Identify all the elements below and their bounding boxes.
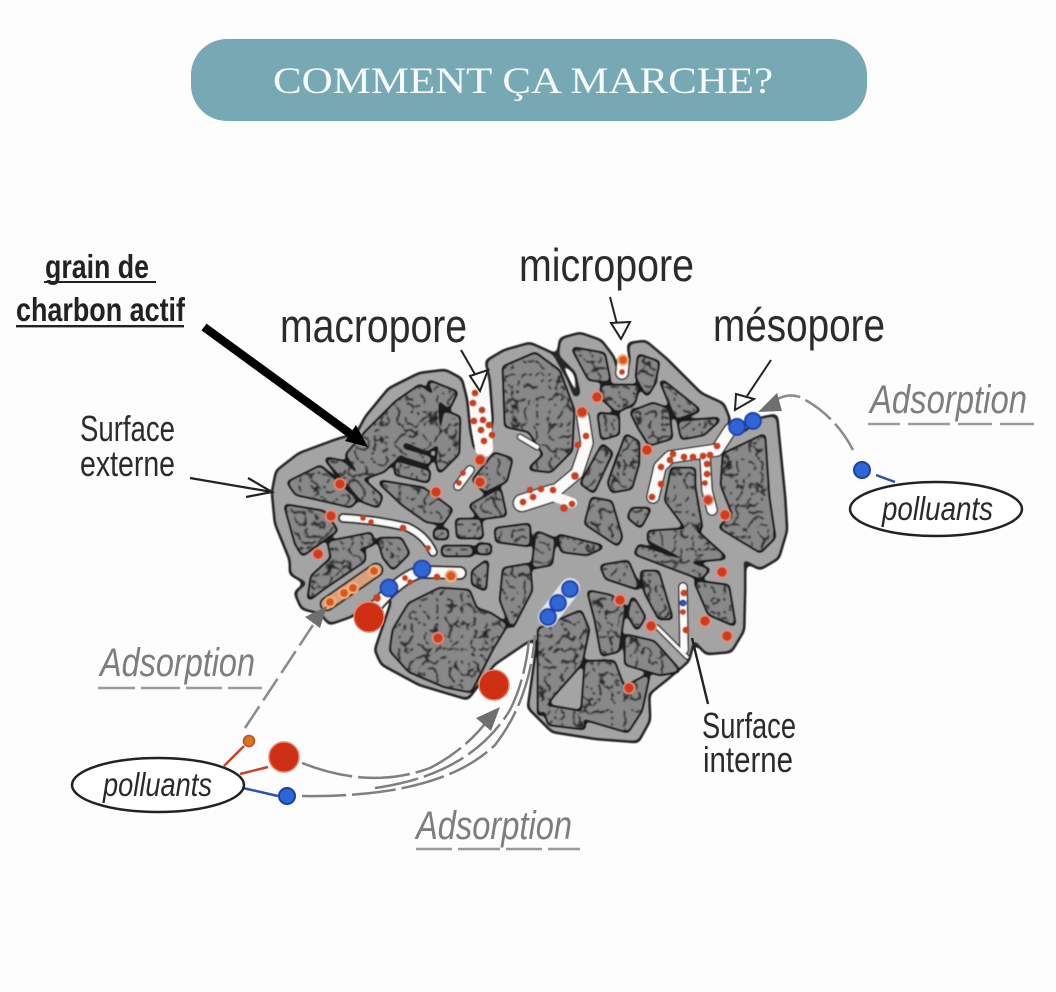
blue particles [380, 413, 761, 625]
label: surface externe [80, 408, 175, 484]
arrow: surface interne [692, 638, 708, 704]
dashed arrow to upper channel [245, 606, 327, 728]
right adsorption group [758, 378, 1034, 536]
pore cell interiors [287, 350, 773, 730]
label: surface interne: interne [703, 739, 793, 780]
arrow: surface externe [190, 478, 272, 497]
arrow: macropore [461, 350, 488, 391]
large red particle at lower lobe [479, 670, 509, 700]
pollutant connectors [224, 746, 278, 796]
grain outline [274, 335, 785, 740]
pollutants oval right [850, 482, 1022, 536]
label: adsorption bottom: Adsorption [414, 804, 572, 848]
label: adsorption left: Adsorption [98, 641, 255, 685]
blue pollutant right [854, 462, 895, 482]
arrow: grain to particle [204, 327, 368, 447]
pollutants oval left [72, 758, 244, 812]
label: surface interne: Surface [702, 705, 796, 746]
pollutants oval left: polluants [102, 766, 212, 803]
label: surface externe: Surface [80, 408, 175, 449]
arrow: mésopore [735, 360, 771, 410]
pore cell borders [287, 350, 773, 730]
left and bottom adsorption group [72, 606, 580, 849]
orange particles in lower channel [325, 355, 628, 607]
label: surface externe: externe [80, 443, 175, 484]
pore channels white [327, 362, 730, 657]
dashed arrow right [758, 393, 853, 450]
label: mésopore: mésopore [713, 299, 885, 351]
label: adsorption right: Adsorption [868, 378, 1027, 422]
large red particle at grain [354, 602, 384, 632]
dashed underline right [868, 423, 1034, 425]
small orange pollutant [244, 736, 254, 746]
arrow: micropore [610, 297, 630, 339]
blue pollutant [279, 788, 295, 804]
activated carbon grain diagram [274, 335, 785, 740]
pollutants oval right: polluants [881, 490, 993, 527]
pore channels outline [327, 362, 730, 657]
title banner: COMMENT ÇA MARCHE? [273, 61, 773, 102]
large red pollutant [269, 742, 299, 772]
large and medium red pollutant particles [312, 392, 732, 694]
label: macropore: macropore [280, 299, 467, 352]
label: micropore: micropore [519, 239, 694, 291]
small red particles in channels [360, 369, 720, 634]
grain body [274, 335, 785, 740]
dashed underline left [98, 687, 262, 689]
label: grain de charbon actif [16, 248, 186, 328]
dashed underline bottom [416, 848, 580, 850]
label: grain de charbon actif: charbon actif [16, 291, 186, 328]
dashed arrow from blue particle [302, 635, 535, 796]
dashed arrow from red particle [302, 707, 500, 778]
label: surface interne [702, 705, 796, 780]
title banner [191, 39, 867, 121]
label: grain de charbon actif: grain de [45, 248, 149, 285]
